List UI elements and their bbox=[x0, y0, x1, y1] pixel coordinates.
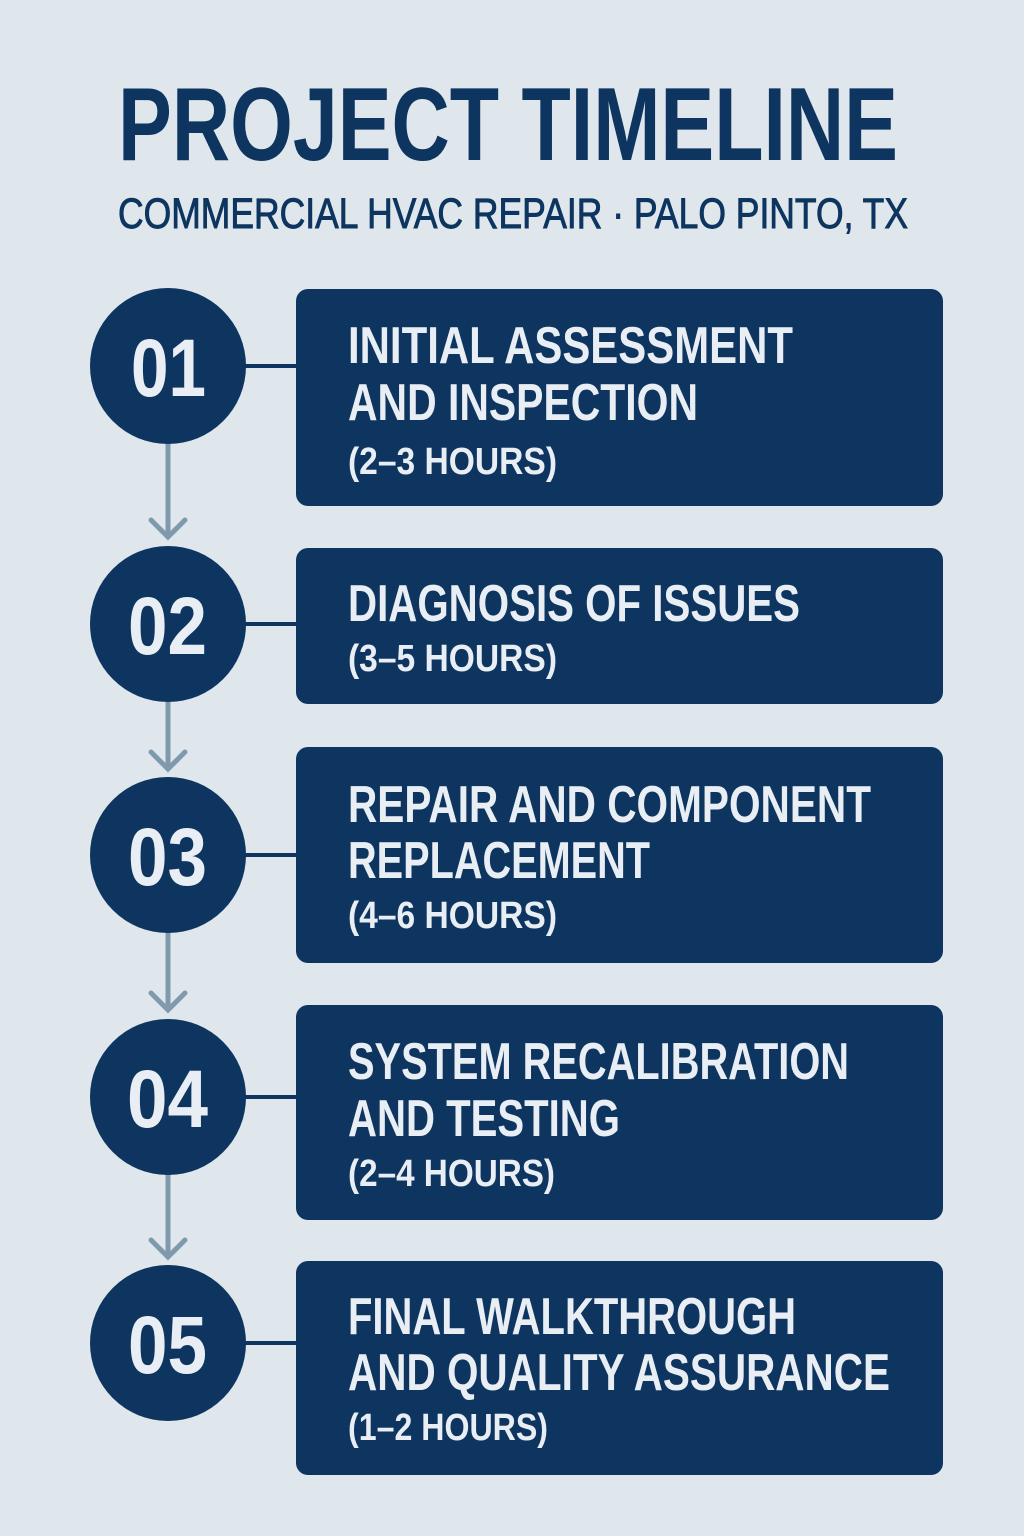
arrow: 04 to 05 bbox=[151, 1175, 185, 1257]
step 04 bbox=[90, 1005, 943, 1220]
box 02 bbox=[296, 548, 943, 704]
box 03 bbox=[296, 747, 943, 963]
circle 04 bbox=[90, 1019, 246, 1175]
connector 02 bbox=[240, 622, 300, 626]
arrow: 01 to 02 bbox=[151, 444, 185, 537]
circle 01: 01 bbox=[131, 323, 206, 414]
box 01: INITIAL ASSESSMENT bbox=[348, 317, 793, 375]
circle 03 bbox=[90, 777, 246, 933]
box 01: (2–3 HOURS) bbox=[348, 441, 557, 483]
box 05: FINAL WALKTHROUGH bbox=[348, 1288, 796, 1346]
connector 03 bbox=[240, 853, 300, 857]
arrow: 03 to 04 bbox=[151, 933, 185, 1010]
step 03 bbox=[90, 747, 943, 963]
box 04 bbox=[296, 1005, 943, 1220]
box 05: AND QUALITY ASSURANCE bbox=[348, 1344, 890, 1402]
arrow: 02 to 03 bbox=[151, 702, 185, 769]
connector 01 bbox=[240, 364, 300, 368]
connector 05 bbox=[240, 1341, 300, 1345]
box 02: DIAGNOSIS OF ISSUES bbox=[348, 575, 800, 633]
connector 04 bbox=[240, 1095, 300, 1099]
step 01 bbox=[90, 288, 943, 506]
box 01: AND INSPECTION bbox=[348, 374, 698, 432]
box 02: (3–5 HOURS) bbox=[348, 638, 557, 680]
box 03: (4–6 HOURS) bbox=[348, 895, 557, 937]
step 05 bbox=[90, 1261, 943, 1475]
box 03: REPLACEMENT bbox=[348, 832, 650, 890]
box 05: (1–2 HOURS) bbox=[348, 1407, 548, 1449]
circle 02 bbox=[90, 546, 246, 702]
box 03: REPAIR AND COMPONENT bbox=[348, 776, 871, 834]
box 05 bbox=[296, 1261, 943, 1475]
box 04: SYSTEM RECALIBRATION bbox=[348, 1033, 849, 1091]
step 02 bbox=[90, 546, 943, 704]
box 04: (2–4 HOURS) bbox=[348, 1153, 555, 1195]
circle 05 bbox=[90, 1265, 246, 1421]
circle 02: 02 bbox=[128, 581, 207, 672]
circle 05: 05 bbox=[128, 1300, 207, 1391]
circle 03: 03 bbox=[128, 812, 207, 903]
box 01 bbox=[296, 289, 943, 506]
circle 01 bbox=[90, 288, 246, 444]
circle 04: 04 bbox=[127, 1054, 208, 1145]
box 04: AND TESTING bbox=[348, 1090, 620, 1148]
